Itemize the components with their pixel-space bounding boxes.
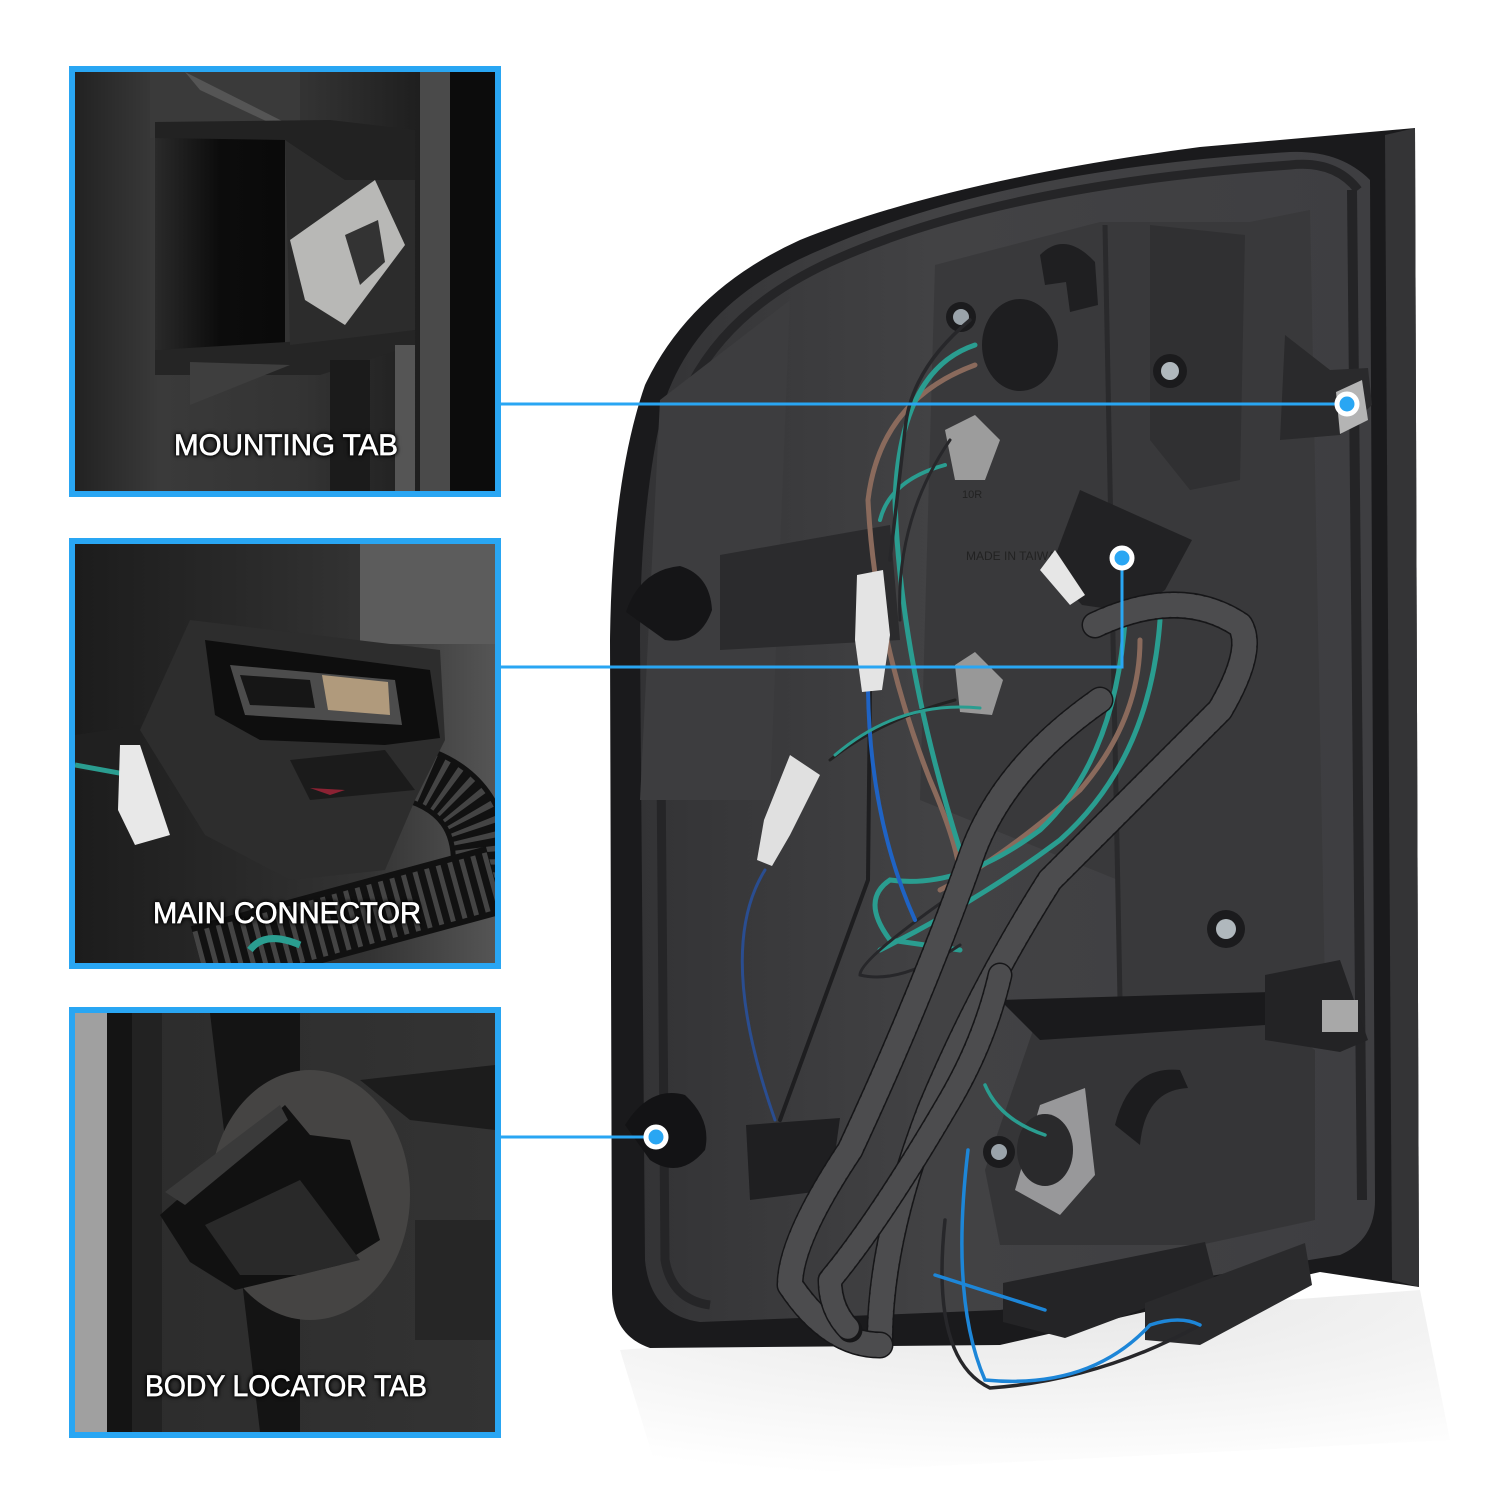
right outer lens edge — [1385, 128, 1419, 1287]
callout line: mounting tab — [501, 394, 1357, 414]
panel frame — [72, 69, 498, 494]
central darker module — [920, 210, 1325, 1000]
lower lamp module — [985, 1010, 1315, 1245]
panel label: MAIN CONNECTOR — [153, 897, 421, 930]
teal wires lower lamp — [985, 1085, 1045, 1135]
washer — [210, 1070, 410, 1320]
molded small text: MADE IN TAIWAN — [966, 549, 1064, 563]
lower left black junction box — [746, 1118, 840, 1200]
panel label: MOUNTING TAB — [174, 429, 398, 462]
screws — [946, 302, 976, 332]
panel frame — [72, 1010, 498, 1435]
panel photo: main connector — [75, 544, 495, 963]
blue wires — [868, 690, 915, 920]
corrugated wire loom — [790, 605, 1244, 1345]
housing outer shell — [610, 128, 1419, 1348]
green wire to holder — [835, 707, 980, 755]
black wires — [890, 320, 970, 560]
panel label: BODY LOCATOR TAB — [145, 1370, 427, 1403]
white connectors — [855, 570, 890, 692]
teal wires — [895, 345, 975, 850]
main connector — [1050, 490, 1192, 612]
panel photo: body locator tab — [75, 1013, 495, 1432]
upper bulb socket — [982, 299, 1058, 391]
brown wires — [868, 365, 975, 880]
lower mounting tab clip — [1265, 960, 1368, 1052]
small lamp holders — [945, 415, 1000, 480]
floor reflection — [620, 1290, 1450, 1480]
panel photo: mounting tab — [75, 72, 495, 491]
left mounting bracket — [720, 525, 900, 650]
callout line: main connector — [501, 548, 1132, 667]
housing inner back panel — [640, 152, 1375, 1322]
panel frame — [72, 541, 498, 966]
panel: body locator tab — [72, 1010, 498, 1435]
panel: main connector — [72, 541, 498, 966]
callout line: body locator tab — [501, 1127, 666, 1147]
connector body — [140, 620, 445, 880]
wiring — [742, 320, 1200, 1388]
upper mounting tab clip — [1280, 335, 1372, 440]
lower left body locator fastener — [625, 1093, 706, 1168]
tail light housing: 10R — [962, 489, 982, 501]
bottom black resistor boxes — [1003, 1242, 1215, 1338]
tail light housing — [610, 128, 1419, 1388]
panel: mounting tab — [72, 69, 498, 494]
inner raised gasket line — [660, 164, 1358, 1305]
left body locator fastener — [626, 566, 712, 641]
fastener — [160, 1105, 380, 1290]
lower bulb socket — [1015, 1088, 1095, 1215]
